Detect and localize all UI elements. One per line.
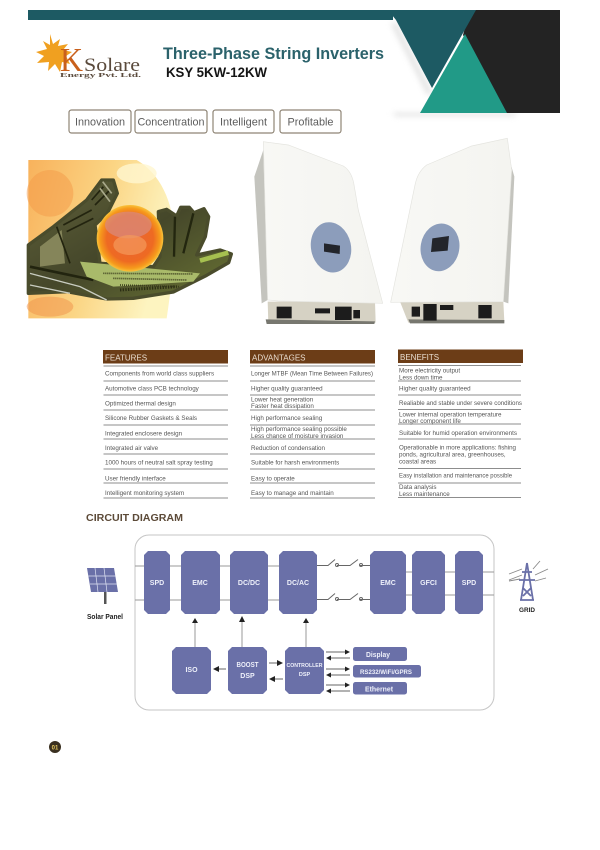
block: BOOST DSP [228, 647, 267, 694]
logo: KSolare Energy: Energy Pvt. Ltd. [60, 72, 142, 79]
panel: benefits: Suitable for humid operation environments [399, 430, 517, 437]
tag: Intelligent: Intelligent [220, 116, 267, 128]
panel: features: Automotive class PCB technology [105, 386, 200, 392]
logo: KSolare Energy: Solare [84, 55, 140, 76]
panel: features: Components from world class suppliers [105, 370, 214, 378]
panel: benefits: Less maintenance [399, 491, 450, 498]
block: CONTROLLER DSP [285, 647, 324, 694]
block: GFCI [412, 551, 445, 614]
panel: benefits [398, 350, 523, 498]
panel: benefits: Lower internal operation temperature [399, 412, 502, 418]
tag: Concentration: Concentration [138, 116, 204, 128]
icon: solar panel [87, 568, 123, 621]
icon: grid tower [509, 561, 548, 614]
panel: features: Optimized thermal design [105, 400, 176, 408]
panel: features: Silicone Rubber Gaskets & Seals [105, 415, 197, 422]
icon: grid tower: GRID [519, 607, 535, 614]
icon: solar panel: Solar Panel [87, 612, 123, 621]
block: SPD output [455, 551, 483, 614]
block: SPD output: SPD [462, 580, 476, 587]
panel: advantages: ADVANTAGES [252, 353, 306, 362]
subtitle: KSY 5KW-12KW [166, 65, 267, 80]
image: robotic hand holding the sun [26, 160, 233, 318]
panel: benefits: Longer component life [399, 418, 461, 425]
block: ISO: ISO [185, 667, 198, 674]
header banner [28, 10, 560, 116]
box: Ethernet [353, 682, 407, 694]
panel: advantages: Faster heat dissipation [251, 403, 314, 410]
block: GFCI: GFCI [420, 580, 437, 587]
left inverter [254, 142, 383, 324]
block: EMC output: EMC [380, 580, 396, 587]
panel: advantages: Easy to manage and maintain [251, 490, 334, 497]
tag: Concentration [135, 110, 207, 133]
panel: features: User friendly interface [105, 476, 166, 482]
block: ISO [172, 647, 211, 694]
page number [49, 741, 61, 753]
panel: advantages: Suitable for harsh environments [251, 460, 339, 466]
panel: benefits: More electricity output [399, 368, 460, 374]
block: BOOST DSP: DSP [240, 673, 255, 680]
panel: features [103, 350, 228, 498]
block: EMC: EMC [192, 580, 208, 587]
tag: Innovation [69, 110, 131, 133]
panel: advantages: Easy to operate [251, 476, 295, 482]
block: CONTROLLER DSP: DSP [299, 672, 310, 678]
block: SPD: SPD [150, 580, 164, 587]
panel: benefits: coastal areas [399, 458, 436, 466]
panel: features: Intelligent monitoring system [105, 490, 184, 497]
panel: features: 1000 hours of neutral salt spray testing [105, 460, 213, 466]
box: Ethernet: Ethernet [365, 686, 394, 694]
right inverter [391, 138, 514, 323]
box: RS232/WiFi/GPRS [353, 665, 421, 678]
panel: advantages: Lower heat generation [251, 396, 314, 404]
panel: advantages: High performance sealing [251, 415, 323, 422]
box: RS232/WiFi/GPRS: RS232/WiFi/GPRS [360, 669, 413, 676]
block: CONTROLLER DSP: CONTROLLER [286, 663, 323, 669]
switches lower [317, 594, 370, 600]
panel: advantages: Reduction of condensation [251, 445, 326, 452]
block: EMC output [370, 551, 406, 614]
tag: Profitable: Profitable [288, 116, 334, 128]
box: Display: Display [366, 652, 390, 659]
title: Three-Phase String Inverters [163, 45, 384, 63]
block: DC/AC: DC/AC [287, 580, 309, 587]
tag: Innovation: Innovation [75, 116, 125, 128]
block: DC/DC: DC/DC [238, 580, 260, 587]
panel: benefits: Higher quality guaranteed [399, 386, 471, 392]
block: BOOST DSP: BOOST [236, 662, 259, 669]
panel: benefits: Operationable in more applications: fishing [399, 444, 517, 452]
panel: benefits: BENEFITS [400, 353, 439, 362]
panel: advantages: Longer MTBF (Mean Time Between Failures) [251, 370, 373, 378]
panel: advantages: High performance sealing possible [251, 426, 347, 433]
switches upper [317, 560, 370, 566]
panel: benefits: ponds, agricultural area, greenhouses, [399, 452, 506, 458]
panel: features: Integrated enclosere design [105, 430, 183, 438]
panel: advantages [250, 350, 375, 498]
tag: Intelligent [213, 110, 274, 133]
box: Display [353, 647, 407, 661]
panel: advantages: Less chance of moisture invasion [251, 433, 344, 440]
heading: circuit diagram: CIRCUIT DIAGRAM [86, 512, 183, 524]
arrows: control signals [192, 616, 350, 694]
block: EMC [181, 551, 220, 614]
panel: benefits: Data analysis [399, 484, 437, 491]
image: inverter units [254, 138, 514, 324]
block: DC/DC [230, 551, 268, 614]
panel: benefits: Less down time [399, 374, 443, 382]
panel: features: FEATURES [105, 353, 147, 362]
block: SPD [144, 551, 170, 614]
logo: KSolare Energy: K [60, 42, 83, 79]
panel: benefits: Easy installation and maintenance possible [399, 472, 512, 480]
panel: advantages: Higher quality guaranteed [251, 386, 323, 392]
page number: 01 [52, 745, 59, 751]
panel: circuit diagram [135, 535, 494, 710]
panel: features: Integrated air valve [105, 445, 159, 452]
tag: Profitable [280, 110, 341, 133]
panel: benefits: Realiable and stable under severe conditions [399, 400, 522, 407]
logo: KSolare Energy [36, 34, 142, 79]
block: DC/AC [279, 551, 317, 614]
